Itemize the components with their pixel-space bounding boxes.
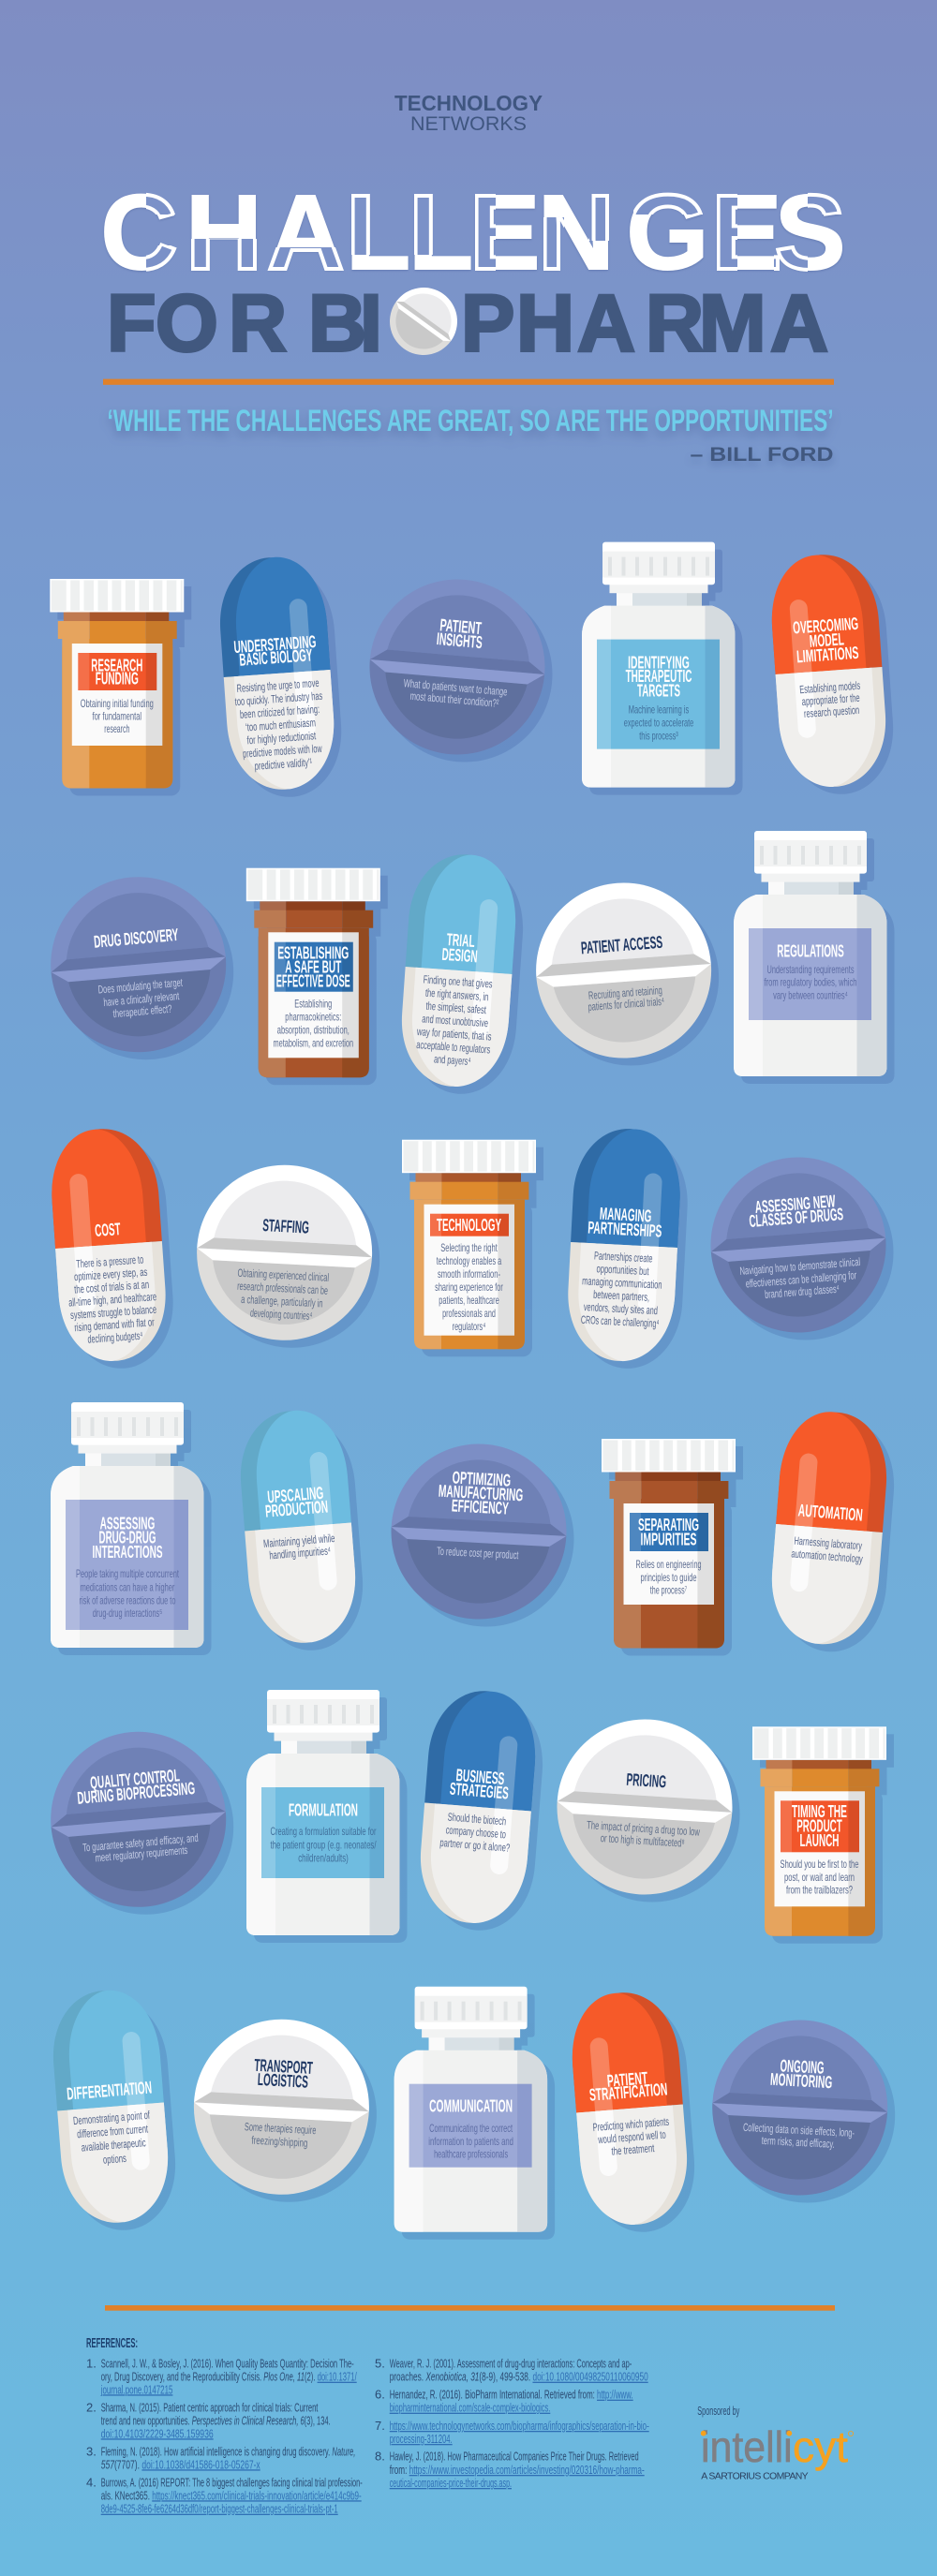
heading: ASSESSING NEW xyxy=(754,1191,837,1217)
heading xyxy=(92,1513,163,1562)
heading: QUALITY CONTROL xyxy=(89,1765,180,1793)
body text: company choose to xyxy=(445,1823,507,1841)
body text: from the trailblazers? xyxy=(786,1884,853,1897)
body text: CROs can be challenging⁴ xyxy=(581,1313,660,1330)
body text xyxy=(244,2120,317,2150)
body text: Demonstrating a point of xyxy=(73,2109,151,2127)
body text xyxy=(791,1533,864,1565)
bottle: regulations xyxy=(734,831,894,1084)
body text: handling impurities⁴ xyxy=(269,1544,331,1562)
body text: from regulatory bodies, which xyxy=(765,976,856,989)
references right column: ceutical-companies-price-their-drugs.asp. xyxy=(390,2476,512,2490)
heading xyxy=(747,1191,844,1231)
heading xyxy=(263,1483,329,1521)
heading: TRANSPORT xyxy=(254,2055,314,2078)
body text: children/adults) xyxy=(298,1851,349,1864)
references right column: processing-311204. xyxy=(390,2432,453,2446)
body text: Finding one that gives xyxy=(423,972,493,991)
body text: risk of adverse reactions due to xyxy=(79,1593,176,1606)
heading: LIMITATIONS xyxy=(796,643,859,666)
body text: declining budgets⁴ xyxy=(87,1329,143,1346)
references left column: 3. xyxy=(86,2444,97,2458)
tablet: quality control during bioprocessing xyxy=(43,1725,233,1915)
tablet: assessing new classes of drugs xyxy=(704,1150,894,1340)
heading: ASSESSING xyxy=(100,1513,155,1532)
heading: PATIENT xyxy=(606,2067,648,2091)
heading: ONGOING xyxy=(780,2055,825,2078)
heading: INTERACTIONS xyxy=(92,1542,163,1562)
body text: Navigating how to demonstrate clinical xyxy=(739,1255,861,1278)
capsule: patient stratification xyxy=(567,1989,700,2236)
tablet: ongoing monitoring xyxy=(707,2016,895,2203)
body text: managing communication xyxy=(582,1274,662,1292)
body text: metabolism, and excretion xyxy=(274,1036,353,1049)
body text: all-time high, and healthcare xyxy=(68,1290,157,1310)
references left column: Burrows, A. (2016) REPORT: The 8 biggest challenges facing clinical trial profession- xyxy=(101,2476,363,2490)
body text: this process³ xyxy=(639,729,678,742)
body text: What do patients want to change xyxy=(403,676,508,699)
body text: and payers⁴ xyxy=(434,1052,471,1068)
references left column: 1. xyxy=(86,2356,97,2370)
references left column: 8de9-4525-8fe6-fe6264d36df0/report-biggest-challenges-clinical-trials-pt-1 xyxy=(101,2502,338,2516)
heading xyxy=(91,656,142,688)
heading: MANAGING xyxy=(599,1204,652,1225)
body text: automation technology xyxy=(791,1547,863,1565)
heading: PRODUCT xyxy=(796,1816,842,1836)
body text xyxy=(780,1858,859,1897)
heading: UNDERSTANDING xyxy=(233,631,317,657)
heading: EFFICIENCY xyxy=(451,1495,510,1518)
body text: for fundamental xyxy=(92,710,141,723)
body text: Understanding requirements xyxy=(766,963,855,976)
body text: Predicting which patients xyxy=(592,2115,670,2134)
heading: UPSCALING xyxy=(267,1483,324,1506)
heading xyxy=(449,1765,511,1802)
body text xyxy=(799,679,862,720)
heading: LOGISTICS xyxy=(257,2069,308,2092)
references left column: 4. xyxy=(86,2476,97,2490)
references left column: journal.pone.0147215 xyxy=(100,2382,172,2396)
references left column: Sharma, N. (2015). Patient centric approach for clinical trials: Current xyxy=(101,2400,319,2414)
heading: MODEL xyxy=(809,629,844,651)
heading: DRUG DISCOVERY xyxy=(93,925,180,952)
capsule: managing partnerships xyxy=(565,1126,691,1371)
body text: Should the biotech xyxy=(447,1811,507,1828)
heading: INSIGHTS xyxy=(436,629,483,652)
jar: establishing a safe but effective dose xyxy=(246,868,388,1085)
body text: a challenge, particularly in xyxy=(241,1293,323,1310)
body text: Establishing xyxy=(294,998,332,1011)
title: Challenges: CHALLENGES xyxy=(101,173,845,291)
body text xyxy=(262,1532,336,1562)
references right column: Weaver, R. J. (2001). Assessment of drug-drug interactions: Concepts and ap- xyxy=(390,2356,632,2370)
body text: for highly reductionist xyxy=(246,729,317,747)
body text: options xyxy=(102,2152,126,2167)
body text: therapeutic effect? xyxy=(112,1002,172,1020)
heading: MANUFACTURING xyxy=(438,1481,524,1504)
tablet: pricing xyxy=(552,1714,740,1902)
heading xyxy=(587,1203,663,1241)
body text xyxy=(435,1241,503,1333)
body text: The impact of pricing a drug too low xyxy=(587,1818,701,1839)
jar: technology xyxy=(402,1140,543,1356)
heading: STAFFING xyxy=(262,1215,309,1237)
heading: CLASSES OF DRUGS xyxy=(749,1204,844,1231)
body text: vendors, study sites and xyxy=(584,1300,658,1317)
jar: establishing a safe but effective dose: EFFECTIVE DOSE xyxy=(276,971,350,991)
body text: Relies on engineering xyxy=(635,1558,701,1571)
heading: TECHNOLOGY xyxy=(437,1215,501,1235)
capsule: upscaling production xyxy=(235,1407,368,1654)
capsule: trial design xyxy=(397,851,528,1098)
body text: Resisting the urge to move xyxy=(236,676,320,695)
jar: separating impurities xyxy=(602,1439,743,1656)
capsule: cost xyxy=(47,1125,178,1372)
body text: post, or wait and learn xyxy=(784,1871,855,1884)
body text: drug-drug interactions⁵ xyxy=(93,1606,162,1620)
heading: AUTOMATION xyxy=(797,1500,864,1525)
body text: predictive models with low xyxy=(243,742,322,761)
tablet: transport logistics xyxy=(189,2015,377,2202)
heading: TRIAL xyxy=(446,929,475,951)
quote attribution: – BILL FORD xyxy=(690,444,834,466)
heading xyxy=(626,652,692,701)
divider bar top xyxy=(103,379,834,385)
body text: and most unobtrusive xyxy=(422,1012,489,1029)
heading: DESIGN xyxy=(441,944,478,966)
body text xyxy=(270,1825,377,1864)
body text: vary between countries⁴ xyxy=(773,989,848,1002)
body text: rising demand with flat or xyxy=(74,1315,155,1334)
heading xyxy=(638,1515,699,1548)
body text: between partners, xyxy=(593,1288,649,1304)
icon: tablet in title xyxy=(377,274,470,368)
references left column: Fleming, N. (2018). How artificial intelligence is changing drug discovery. Nature, xyxy=(101,2444,355,2458)
body text xyxy=(274,998,353,1049)
references right column: 6. xyxy=(375,2388,385,2402)
jar: research funding xyxy=(50,579,191,796)
body text: Some therapies require xyxy=(245,2120,317,2137)
logo: Technology Networks: TECHNOLOGY xyxy=(394,91,543,115)
body text xyxy=(428,2122,513,2161)
body text: technology enables a xyxy=(437,1254,501,1267)
body text xyxy=(742,2121,855,2152)
references right column: 7. xyxy=(375,2419,385,2433)
heading xyxy=(233,631,318,670)
body text: Should you be first to the xyxy=(780,1858,859,1871)
heading xyxy=(253,2055,314,2092)
jar: timing the product launch xyxy=(752,1726,894,1944)
heading: PARTNERSHIPS xyxy=(587,1217,662,1241)
body text: the cost of trials is at an xyxy=(74,1278,150,1296)
body text xyxy=(66,1252,159,1347)
body text xyxy=(233,676,328,774)
body text: way for patients, that is xyxy=(416,1025,492,1044)
heading: SEPARATING xyxy=(638,1515,699,1534)
body text: term risks, and efficacy. xyxy=(761,2134,835,2151)
heading: OVERCOMING xyxy=(792,614,859,638)
logo: intellicyt: cyt xyxy=(793,2422,848,2471)
body text: sharing experience for xyxy=(435,1281,503,1294)
body text: or too high is multifaceted⁸ xyxy=(600,1831,685,1850)
body text: would respond well to xyxy=(597,2128,666,2146)
heading: OPTIMIZING xyxy=(452,1467,512,1490)
body text: Communicating the correct xyxy=(429,2122,513,2135)
references left column: als. KNect365. https://knect365.com/clinical-trials-innovation/article/e414c9b9- xyxy=(101,2488,362,2502)
title: For Biopharma: FOR BIOPHARMA xyxy=(107,279,828,369)
body text: research xyxy=(104,722,129,735)
body text: systems struggle to balance xyxy=(70,1303,157,1322)
body text: acceptable to regulators xyxy=(416,1038,491,1057)
body text: too quickly. The industry has xyxy=(234,689,323,708)
capsule: differentiation xyxy=(48,1987,181,2234)
logo: Technology Networks xyxy=(394,91,543,135)
body text: the patient group (e.g. neonates/ xyxy=(270,1838,377,1851)
logo: intellicyt xyxy=(701,2422,854,2482)
heading: TARGETS xyxy=(637,681,680,701)
body text xyxy=(439,1810,513,1855)
heading: IMPURITIES xyxy=(641,1529,697,1548)
bottle: identifying therapeutic targets xyxy=(582,542,742,795)
body text: been criticized for having: xyxy=(239,703,320,721)
body text xyxy=(76,1567,179,1620)
body text: healthcare professionals xyxy=(434,2148,508,2161)
heading: TIMING THE xyxy=(792,1801,847,1821)
tablet: drug discovery xyxy=(43,869,233,1059)
body text xyxy=(82,1831,200,1866)
body text: brand new drug classes⁴ xyxy=(765,1282,840,1301)
references right column xyxy=(375,2356,649,2490)
heading: FORMULATION xyxy=(289,1799,358,1819)
heading: STRATEGIES xyxy=(449,1779,510,1802)
heading xyxy=(438,1467,525,1518)
body text: Maintaining yield while xyxy=(262,1532,335,1550)
body text: have a clinically relevant xyxy=(103,989,180,1009)
heading: STRATIFICATION xyxy=(588,2079,668,2105)
heading: IDENTIFYING xyxy=(628,652,690,672)
body text: predictive validity’¹ xyxy=(254,756,313,773)
heading: PATIENT ACCESS xyxy=(580,932,663,957)
body text: information to patients and xyxy=(428,2135,513,2148)
references right column: https://www.technologynetworks.com/biopharma/infographics/separation-in-bio- xyxy=(390,2419,649,2433)
heading: ESTABLISHING xyxy=(277,942,349,962)
bottle: communication xyxy=(394,1987,555,2240)
body text xyxy=(739,1255,863,1303)
references left column: doi:10.4103/2229-3485.159936 xyxy=(101,2426,214,2440)
body text: Does modulating the target xyxy=(97,976,184,997)
body text: Recruiting and retaining xyxy=(587,984,662,1002)
heading: PRODUCTION xyxy=(264,1496,329,1521)
references right column: 8. xyxy=(375,2450,385,2464)
body text xyxy=(587,984,665,1014)
tablet: staffing xyxy=(192,1161,379,1348)
heading: THERAPEUTIC xyxy=(626,666,692,686)
references left column: Scannell, J. W., & Bosley, J. (2016). When Quality Beats Quantity: Decision The- xyxy=(101,2356,354,2370)
heading: COMMUNICATION xyxy=(429,2095,513,2115)
title inline outline detail: CHALLENGES xyxy=(101,173,845,291)
heading: REGULATIONS xyxy=(777,941,844,961)
heading xyxy=(441,929,479,966)
body text xyxy=(580,1249,663,1330)
body text: effectiveness can be challenging for xyxy=(745,1268,857,1291)
body text: Obtaining experienced clinical xyxy=(237,1266,329,1284)
references right column: from: https://www.investopedia.com/articles/investing/020316/how-pharma- xyxy=(390,2463,645,2477)
body text: research question xyxy=(804,703,860,720)
body text: Partnerships create xyxy=(594,1249,653,1266)
bottle: assessing drug-drug interactions xyxy=(51,1402,212,1655)
body text: Obtaining initial funding xyxy=(81,697,154,710)
heading xyxy=(75,1764,196,1808)
heading xyxy=(587,2066,668,2105)
body text: medications can have a higher xyxy=(81,1580,174,1593)
body text: absorption, distribution, xyxy=(277,1024,350,1037)
heading xyxy=(792,614,861,666)
body text xyxy=(414,972,496,1070)
body text: the right answers, in xyxy=(424,986,489,1003)
body text: patients for clinical trials⁴ xyxy=(587,995,665,1014)
logo: Technology Networks: NETWORKS xyxy=(410,113,527,135)
capsule: automation xyxy=(766,1408,900,1656)
body text: Collecting data on side effects, long- xyxy=(743,2121,855,2139)
heading xyxy=(792,1801,847,1850)
body text: patients, healthcare xyxy=(439,1294,499,1307)
body text: partner or go it alone? xyxy=(439,1836,511,1855)
heading: FUNDING xyxy=(96,669,139,688)
body text: the simplest, safest xyxy=(425,999,487,1016)
logo: intellicyt: intelli xyxy=(701,2422,793,2471)
body text: ‘too much enthusiasm xyxy=(245,716,316,733)
body text: freezing/shipping xyxy=(251,2134,308,2150)
heading: COST xyxy=(94,1219,122,1240)
body text: smooth information- xyxy=(438,1267,500,1281)
sponsored by label: Sponsored by xyxy=(697,2404,740,2418)
body text: opportunities but xyxy=(596,1262,649,1278)
body text: People taking multiple concurrent xyxy=(76,1567,179,1580)
body text: the process⁷ xyxy=(650,1584,687,1597)
references right column: Hawley, J. (2018). How Pharmaceutical Companies Price Their Drugs. Retrieved xyxy=(390,2450,639,2464)
body text: expected to accelerate xyxy=(624,717,693,730)
body text: research professionals can be xyxy=(237,1280,329,1297)
body text: regulators⁴ xyxy=(453,1320,485,1333)
body text xyxy=(97,976,186,1021)
body text: professionals and xyxy=(442,1307,496,1320)
references left column: 557(7707). doi:10.1038/d41586-018-05267-x xyxy=(101,2457,260,2471)
references right column: Hernandez, R. (2016). BioPharm International. Retrieved from: http://www. xyxy=(390,2388,633,2402)
body text: principles to guide xyxy=(641,1571,697,1584)
references right column: proaches. Xenobiotica, 31(8-9), 499-538. doi:10.1080/00498250110060950 xyxy=(390,2370,648,2384)
divider bar bottom xyxy=(105,2305,835,2311)
body text xyxy=(402,676,508,711)
body text: Harnessing laboratory xyxy=(794,1534,863,1552)
references left column xyxy=(86,2356,363,2516)
heading xyxy=(770,2055,834,2092)
heading: PRICING xyxy=(626,1769,667,1791)
references right column: 5. xyxy=(375,2356,385,2370)
heading: BUSINESS xyxy=(455,1765,505,1788)
references heading: REFERENCES: xyxy=(86,2336,138,2351)
heading: RESEARCH xyxy=(91,656,142,675)
capsule: overcoming model limitations xyxy=(767,551,898,798)
heading: PATIENT xyxy=(439,614,483,638)
heading: DURING BIOPROCESSING xyxy=(77,1778,196,1808)
body text: appropriate for the xyxy=(801,691,860,708)
body text xyxy=(73,2109,154,2169)
body text xyxy=(81,697,154,735)
body text xyxy=(586,1818,701,1851)
references left column: ory, Drug Discovery, and the Reproducibility Crisis. Plos One, 11(2). doi:10.1371/ xyxy=(101,2370,357,2384)
body text: most about their condition?² xyxy=(409,689,499,710)
body text xyxy=(765,963,856,1002)
body text xyxy=(635,1558,701,1597)
body text: Selecting the right xyxy=(440,1241,498,1254)
tablet: optimizing manufacturing efficiency xyxy=(387,1440,573,1626)
heading: DRUG-DRUG xyxy=(99,1528,156,1547)
capsule: business strategies xyxy=(415,1687,548,1934)
heading xyxy=(276,942,350,991)
body text: optimize every step, as xyxy=(74,1266,148,1283)
body text: developing countries⁴ xyxy=(250,1306,313,1323)
heading: DIFFERENTIATION xyxy=(66,2078,153,2104)
body text xyxy=(624,703,693,742)
body text: available therapeutic xyxy=(81,2136,146,2154)
references right column: biopharminternational.com/scale-complex-biologics. xyxy=(390,2401,550,2415)
references left column: trend and new opportunities. Perspectives in Clinical Research, 6(3), 134. xyxy=(101,2413,331,2427)
logo: intellicyt: A SARTORIUS COMPANY xyxy=(701,2471,809,2482)
body text: To reduce cost per product xyxy=(437,1545,519,1562)
body text: There is a pressure to xyxy=(76,1252,144,1270)
heading: MONITORING xyxy=(770,2069,833,2092)
body text: meet regulatory requirements xyxy=(95,1843,188,1864)
bottle: formulation xyxy=(246,1690,407,1943)
heading: BASIC BIOLOGY xyxy=(239,644,313,670)
body text: To guarantee safety and efficacy, and xyxy=(82,1831,199,1855)
body text: Machine learning is xyxy=(629,703,689,717)
body text xyxy=(235,1266,329,1324)
body text: Establishing models xyxy=(799,679,861,696)
body text: the treatment xyxy=(611,2141,655,2158)
heading: A SAFE BUT xyxy=(285,956,342,976)
body text: pharmacokinetics: xyxy=(285,1011,341,1024)
heading xyxy=(436,614,484,652)
body text: Creating a formulation suitable for xyxy=(270,1825,377,1838)
body text: difference from current xyxy=(77,2122,149,2140)
references left column: 2. xyxy=(86,2400,97,2414)
heading: LAUNCH xyxy=(800,1830,840,1850)
tablet: patient access xyxy=(529,877,719,1066)
tablet: patient insights xyxy=(363,572,553,762)
body text xyxy=(592,2115,672,2159)
capsule: understanding basic biology xyxy=(216,554,346,801)
